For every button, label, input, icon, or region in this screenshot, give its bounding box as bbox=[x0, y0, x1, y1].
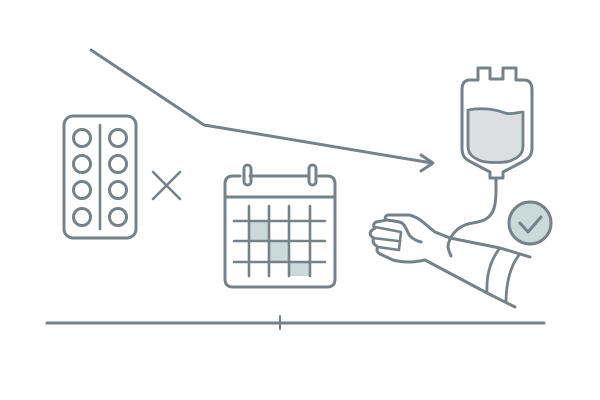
icon: arm bbox=[370, 215, 530, 307]
icon: cross mark bbox=[153, 172, 180, 199]
icon: blister pill pack bbox=[64, 116, 136, 238]
fingers bbox=[373, 227, 401, 250]
blood level bbox=[468, 109, 523, 162]
sleeve cuff bbox=[487, 248, 519, 302]
IV tube bbox=[448, 178, 496, 256]
icon: blood bag bbox=[448, 68, 532, 256]
timeline axis bbox=[47, 316, 544, 329]
arrow: declining line bbox=[91, 50, 433, 171]
arm outline bbox=[370, 215, 530, 307]
thumb bbox=[387, 220, 421, 242]
icon: calendar bbox=[225, 165, 335, 287]
highlighted days bbox=[250, 222, 309, 276]
icon: check badge bbox=[509, 202, 551, 244]
